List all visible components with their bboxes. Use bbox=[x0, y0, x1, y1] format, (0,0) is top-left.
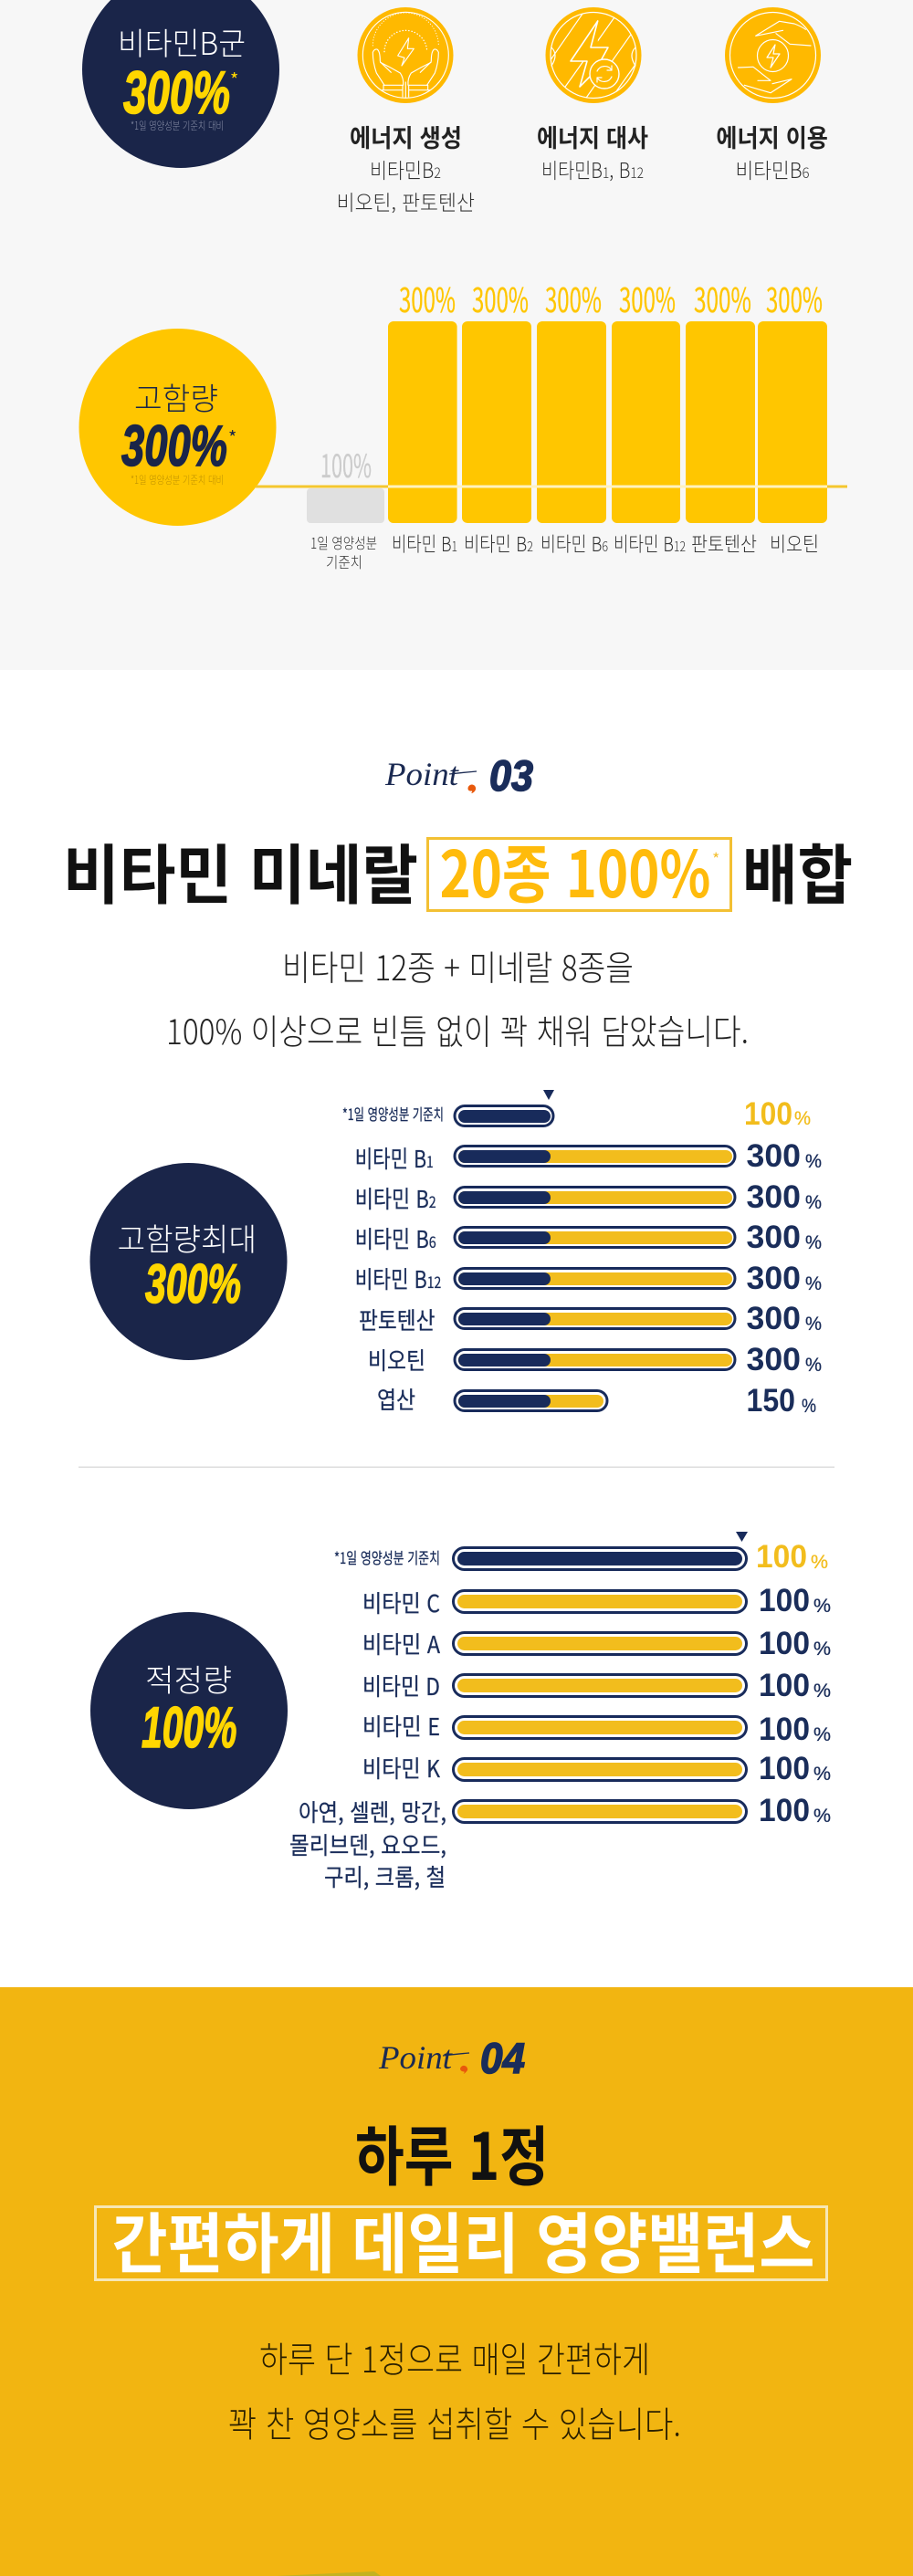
row: vitamin B2: % bbox=[805, 1192, 822, 1213]
row: daily reference: *1일 영양성분 기준치 bbox=[342, 1102, 444, 1125]
row: vitamin E: 비타민 E bbox=[362, 1709, 440, 1743]
row: vitamin C: % bbox=[813, 1596, 831, 1617]
row: daily reference: % bbox=[794, 1108, 811, 1129]
badge: high content 300%: *1일 영양성분 기준치 대비 bbox=[131, 472, 224, 487]
heading tag: Point 04: 04 bbox=[480, 2034, 525, 2082]
row: vitamin C bbox=[362, 1583, 831, 1619]
row: vitamin B6: 비타민 B6 bbox=[355, 1221, 436, 1255]
row: vitamin A: % bbox=[813, 1639, 831, 1660]
label: energy production: 비타민B2 bbox=[370, 153, 441, 184]
row: minerals: 몰리브덴, 요오드, bbox=[289, 1827, 446, 1861]
title: 20 vitamins and minerals 100%: * bbox=[712, 847, 719, 871]
badge: vitamin B group 300%: *1일 영양성분 기준치 대비 bbox=[131, 118, 224, 133]
row: vitamin D: % bbox=[813, 1681, 831, 1702]
row: pantothenic acid: 판토텐산 bbox=[359, 1303, 435, 1336]
badge: high content max 300%: 300% bbox=[145, 1253, 241, 1314]
panel: point 03 section bbox=[0, 670, 913, 1987]
row: vitamin A: 100 bbox=[759, 1626, 810, 1661]
bar chart: adequate nutrients bbox=[289, 1532, 831, 1893]
bar chart: vitamin B content vs daily reference: 1일 영양성분 bbox=[310, 531, 377, 553]
title: 20 vitamins and minerals 100%: 비타민 미네랄 bbox=[63, 824, 418, 917]
row: daily reference: % bbox=[811, 1552, 828, 1573]
text block: description: 비타민 12종 + 미네랄 8종을 bbox=[282, 940, 634, 990]
row: vitamin B12: 300 bbox=[747, 1261, 801, 1296]
row: vitamin K bbox=[362, 1751, 831, 1786]
badge: high content 300% bbox=[79, 329, 276, 526]
bar chart: vitamin B content vs daily reference: 300% bbox=[399, 273, 456, 322]
row: minerals bbox=[289, 1793, 831, 1893]
bar chart: vitamin B content vs daily reference: 300% bbox=[472, 273, 529, 322]
title: 20 vitamins and minerals 100%: 배합 bbox=[742, 824, 853, 917]
row: folic acid: 150 bbox=[747, 1383, 795, 1419]
title: one tablet a day: 하루 1정 bbox=[355, 2106, 549, 2199]
label: energy metabolism bbox=[537, 119, 648, 184]
text block: description bbox=[228, 2332, 681, 2448]
text block: description: 하루 단 1정으로 매일 간편하게 bbox=[259, 2332, 650, 2383]
label: energy use bbox=[716, 119, 828, 184]
badge: vitamin B group 300%: * bbox=[230, 66, 238, 92]
product edge peeking at bottom bbox=[277, 2571, 381, 2576]
row: daily reference bbox=[342, 1090, 811, 1132]
row: vitamin K: 비타민 K bbox=[362, 1751, 440, 1785]
label: energy metabolism: 비타민B1, B12 bbox=[541, 153, 644, 184]
heading tag: Point 04: Point bbox=[378, 2039, 453, 2076]
title box: simple daily nutrition balance: 간편하게 데일리 영양밸런스 bbox=[111, 2191, 814, 2287]
badge: vitamin B group 300% bbox=[82, 0, 279, 168]
row: folic acid: % bbox=[802, 1396, 816, 1417]
row: vitamin E bbox=[362, 1709, 831, 1747]
heading tag: Point 03: Point bbox=[384, 756, 459, 792]
bar chart: vitamin B content vs daily reference: 비타민 B12 bbox=[614, 529, 686, 558]
row: biotin: 비오틴 bbox=[368, 1343, 425, 1377]
label: energy production: 에너지 생성 bbox=[350, 119, 462, 154]
bar chart: vitamin B content vs daily reference: 기준치 bbox=[326, 550, 362, 572]
row: vitamin B6 bbox=[355, 1220, 822, 1255]
icon: energy use, hands around coin bbox=[725, 7, 821, 103]
row: vitamin K: % bbox=[813, 1764, 831, 1785]
label: energy use: 비타민B6 bbox=[736, 153, 809, 184]
row: pantothenic acid: % bbox=[805, 1314, 822, 1335]
row: vitamin D: 100 bbox=[759, 1668, 810, 1703]
row: vitamin B12: 비타민 B12 bbox=[355, 1262, 441, 1295]
panel: point 04 section bbox=[0, 1987, 913, 2576]
row: vitamin B1 bbox=[355, 1138, 822, 1175]
badge: adequate 100%: 100% bbox=[142, 1696, 237, 1760]
bar chart: vitamin B content vs daily reference: 비타민 B2 bbox=[464, 529, 533, 558]
badge: vitamin B group 300%: 300% bbox=[123, 58, 230, 126]
heading tag: Point 04 bbox=[378, 2034, 525, 2082]
row: vitamin B1: 비타민 B1 bbox=[355, 1141, 434, 1175]
bar chart: vitamin B content vs daily reference: 300% bbox=[694, 273, 751, 322]
row: vitamin B1: % bbox=[805, 1151, 822, 1172]
badge: high content max 300%: 고함량최대 bbox=[118, 1215, 257, 1260]
panel: vitamin B section bbox=[79, 0, 847, 570]
row: vitamin A: 비타민 A bbox=[362, 1627, 440, 1660]
badge: high content max 300% bbox=[89, 1163, 287, 1360]
bar chart: vitamin B content vs daily reference: 비타민 B6 bbox=[540, 529, 608, 558]
row: vitamin B6: 300 bbox=[747, 1220, 801, 1255]
bar chart: vitamin B content vs daily reference: 비오틴 bbox=[770, 529, 819, 558]
row: vitamin B2 bbox=[355, 1179, 822, 1215]
label: energy metabolism: 에너지 대사 bbox=[537, 119, 648, 154]
row: daily reference: *1일 영양성분 기준치 bbox=[334, 1545, 440, 1568]
row: pantothenic acid bbox=[359, 1301, 822, 1336]
row: vitamin B2: 비타민 B2 bbox=[355, 1181, 436, 1215]
title: 20 vitamins and minerals 100% bbox=[63, 824, 853, 917]
row: biotin: % bbox=[805, 1355, 822, 1376]
row: vitamin B2: 300 bbox=[747, 1179, 801, 1215]
badge: vitamin B group 300%: 비타민B군 bbox=[118, 19, 246, 64]
icon: energy production, hands and bolt bbox=[358, 7, 453, 103]
label: energy use: 에너지 이용 bbox=[716, 119, 828, 154]
text block: description: 꽉 찬 영양소를 섭취할 수 있습니다. bbox=[228, 2397, 681, 2448]
row: vitamin E: % bbox=[813, 1724, 831, 1745]
row: minerals: 아연, 셀렌, 망간, bbox=[299, 1795, 446, 1828]
row: minerals: 100 bbox=[759, 1793, 810, 1828]
row: minerals: % bbox=[813, 1806, 831, 1827]
text block: description: 100% 이상으로 빈틈 없이 꽉 채워 담았습니다. bbox=[166, 1004, 749, 1054]
row: vitamin D bbox=[362, 1668, 831, 1703]
row: vitamin B12: % bbox=[805, 1273, 822, 1294]
bar chart: vitamin B content vs daily reference: 300% bbox=[545, 273, 602, 322]
title: 20 vitamins and minerals 100%: 20종 100% bbox=[440, 824, 710, 916]
badge: adequate 100%: 적정량 bbox=[145, 1656, 232, 1701]
row: vitamin A bbox=[362, 1626, 831, 1661]
row: minerals: 구리, 크롬, 철 bbox=[324, 1859, 446, 1893]
row: daily reference: 100 bbox=[756, 1539, 807, 1575]
label: energy production: 비오틴, 판토텐산 bbox=[337, 185, 475, 216]
badge: adequate 100% bbox=[90, 1612, 288, 1809]
row: vitamin B1: 300 bbox=[747, 1138, 801, 1174]
row: folic acid: 엽산 bbox=[377, 1382, 415, 1416]
row: vitamin K: 100 bbox=[759, 1751, 810, 1786]
badge: high content 300%: 고함량 bbox=[134, 374, 218, 419]
bar chart: vitamin B content vs daily reference: 100% bbox=[320, 441, 372, 487]
bar chart: vitamin B content vs daily reference: 판토텐산 bbox=[691, 529, 757, 558]
text block: description bbox=[166, 940, 749, 1054]
row: folic acid bbox=[377, 1382, 816, 1419]
heading tag: Point 03: 03 bbox=[489, 751, 533, 800]
bar chart: vitamin B content vs daily reference: 300% bbox=[619, 273, 676, 322]
bar chart: vitamin B content vs daily reference: 300% bbox=[766, 273, 823, 322]
heading tag: Point 03 bbox=[384, 751, 533, 800]
icon: energy metabolism, bolt and cycle bbox=[546, 0, 641, 103]
badge: high content 300%: 300% bbox=[121, 414, 227, 478]
label: energy production bbox=[337, 119, 475, 216]
row: vitamin E: 100 bbox=[759, 1712, 810, 1747]
row: biotin: 300 bbox=[747, 1342, 801, 1377]
row: vitamin D: 비타민 D bbox=[362, 1669, 440, 1702]
row: vitamin B6: % bbox=[805, 1232, 822, 1253]
bar chart: vitamin B content vs daily reference bbox=[256, 273, 847, 572]
badge: high content 300%: * bbox=[228, 424, 236, 450]
row: biotin bbox=[368, 1342, 822, 1377]
row: vitamin C: 비타민 C bbox=[362, 1586, 440, 1619]
row: vitamin B12 bbox=[355, 1261, 822, 1296]
bar chart: high content nutrients bbox=[342, 1090, 822, 1419]
row: daily reference bbox=[334, 1532, 828, 1575]
bar chart: vitamin B content vs daily reference: 비타민 B1 bbox=[392, 529, 457, 558]
row: daily reference: 100 bbox=[744, 1096, 792, 1132]
row: pantothenic acid: 300 bbox=[747, 1301, 801, 1336]
row: vitamin C: 100 bbox=[759, 1583, 810, 1618]
